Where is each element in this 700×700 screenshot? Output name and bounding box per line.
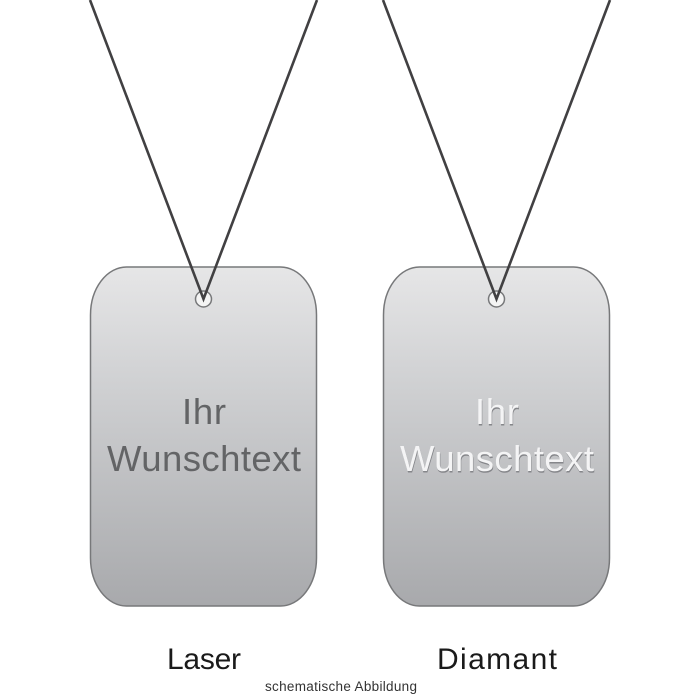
engraved text: diamond: Wunschtext [400,438,594,479]
engraved text: laser [107,391,301,479]
tag hole [196,291,212,307]
engraved text: diamond: Ihr [475,391,519,432]
tag hole [488,291,504,307]
engraved text: laser: Wunschtext [107,438,301,479]
panel: diamond tag [383,0,610,606]
engraved text: diamond [400,391,594,480]
tag body [90,267,316,606]
panel: laser tag [90,0,317,606]
caption: schematische Abbildung [265,679,417,694]
engraved text: diamond: Ihr [476,392,520,434]
engraved text: laser: Ihr [182,391,226,432]
label: diamant: Diamant [437,643,558,676]
label: laser: Laser [167,643,241,676]
tag body [384,267,610,606]
cord [383,0,610,299]
cord [90,0,317,299]
engraved text: diamond: Wunschtext [400,440,594,480]
